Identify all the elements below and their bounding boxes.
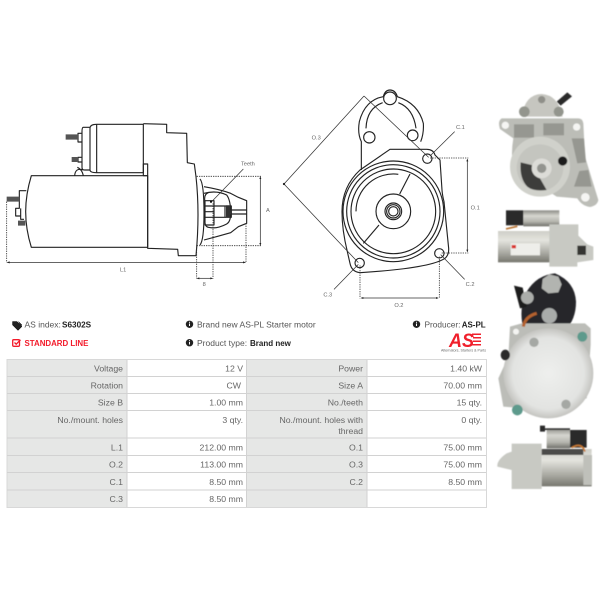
flange plate [498, 323, 591, 408]
row: voltage and power: Voltage [94, 364, 123, 374]
row: O.2 and O.3: O.3 [349, 460, 363, 470]
dimension O.2 [360, 257, 439, 309]
housing [549, 224, 593, 267]
row: C.1 and C.2: C.2 [349, 477, 363, 487]
front view technical drawing [283, 90, 480, 309]
specifications table [7, 360, 486, 508]
info: brand new starter: Brand new AS-PL Starter motor [197, 320, 316, 330]
info: AS index: S6302S [62, 320, 92, 330]
info: product type: Product type: [197, 338, 247, 348]
logo: AS-PL: AS [448, 331, 474, 352]
row: size B and teeth: Size B [98, 398, 123, 408]
bolts [519, 96, 564, 117]
top mounting ear [359, 90, 423, 170]
row: rotation and size A: Size A [338, 380, 363, 390]
copper wire [523, 313, 537, 327]
dimension O.3 [283, 96, 429, 263]
dark plug [558, 156, 567, 166]
row: size B and teeth: No./teeth [328, 398, 363, 408]
pockets [514, 123, 592, 187]
bracket [514, 286, 527, 308]
row: mount holes: No./mount. holes with [279, 415, 363, 425]
callout C.2: C.2 [466, 282, 474, 288]
logo: AS-PL: Alternators, Starters & Parts [441, 348, 486, 352]
solenoid black cap [521, 273, 576, 330]
dimension L1: L1 [120, 267, 126, 273]
round housing [510, 137, 570, 197]
callout C.1 [430, 125, 465, 156]
wire [572, 445, 585, 452]
dimension L1 [7, 202, 246, 273]
info: AS index: AS index: [24, 320, 61, 330]
row: mount holes [57, 415, 482, 436]
row: C.3 [109, 494, 243, 504]
info: AS index [12, 320, 92, 330]
row: O.2 and O.3: 113.00 mm [200, 460, 243, 470]
row: C.3: C.3 [109, 494, 123, 504]
row: voltage and power: 1.40 kW [450, 364, 483, 374]
photo: starter front view [499, 92, 598, 207]
callout C.1: C.1 [456, 125, 465, 131]
row: L.1 and O.1: L.1 [111, 442, 123, 452]
motor cylinder [498, 231, 551, 262]
row: C.1 and C.2 [109, 477, 482, 487]
dimension O.3: O.3 [312, 135, 321, 141]
row: L.1 and O.1: 75.00 mm [443, 442, 482, 452]
icon: info circle [186, 321, 193, 328]
logo: AS-PL [441, 331, 486, 352]
drive housing [143, 124, 198, 256]
wire [506, 226, 517, 229]
photo: starter side view top [498, 210, 593, 267]
row: rotation and size A: Rotation [91, 380, 123, 390]
drive housing [497, 444, 542, 489]
black connector [557, 92, 572, 106]
solenoid [66, 124, 143, 176]
icon: info circle [413, 321, 420, 328]
drive end [577, 246, 586, 255]
end clamp [583, 455, 592, 485]
solenoid can [547, 428, 570, 448]
flange [499, 118, 598, 207]
dimension O.1: O.1 [471, 205, 480, 211]
side view technical drawing [7, 124, 270, 288]
row: size B and teeth [98, 398, 482, 408]
row: O.2 and O.3: O.2 [109, 460, 123, 470]
callout C.3 [323, 264, 358, 298]
label sticker [511, 243, 540, 255]
motor cylinder [542, 449, 592, 486]
flange holes [502, 122, 590, 202]
flange outline [342, 149, 449, 273]
rear cap [503, 328, 593, 418]
row: C.1 and C.2: C.1 [109, 477, 123, 487]
row: voltage and power [94, 364, 483, 374]
pinion nose [200, 179, 247, 245]
row: C.1 and C.2: 8.50 mm [448, 477, 482, 487]
row: C.1 and C.2: 8.50 mm [209, 477, 243, 487]
row: mount holes: thread [338, 426, 363, 436]
solenoid can [523, 210, 559, 226]
info: standard line: STANDARD LINE [24, 339, 88, 348]
row: rotation and size A: 70.00 mm [443, 380, 482, 390]
icon: info circle [186, 339, 193, 346]
dimension B [197, 203, 213, 288]
row: L.1 and O.1 [111, 442, 482, 452]
icon: tags [12, 322, 22, 330]
rear terminals [7, 191, 26, 226]
row: mount holes: 3 qty. [222, 415, 243, 425]
row: rotation and size A [91, 380, 482, 390]
upper lobe [522, 94, 563, 117]
row: rotation and size A: CW [227, 380, 242, 390]
photo: starter rear view [498, 273, 593, 418]
solenoid cap [506, 210, 523, 225]
mounting holes [355, 154, 444, 268]
row: L.1 and O.1: 212.00 mm [200, 442, 243, 452]
dark bracket [542, 449, 583, 455]
row: voltage and power: 12 V [225, 364, 243, 374]
dimension O.1 [430, 158, 480, 253]
row: voltage and power: Power [338, 364, 363, 374]
info: producer [413, 320, 486, 330]
callout C.3: C.3 [323, 292, 332, 298]
motor body [26, 176, 148, 247]
teeth label and leader [210, 162, 255, 203]
callout C.2 [441, 255, 474, 288]
row: mount holes: 0 qty. [461, 415, 482, 425]
photo: starter side view bottom [497, 426, 592, 489]
dimension B: 8 [203, 282, 206, 288]
cap screws [512, 332, 587, 415]
row: O.2 and O.3: 75.00 mm [443, 460, 482, 470]
info: product type [186, 338, 292, 348]
gear window [520, 162, 547, 190]
row: size B and teeth: 1.00 mm [209, 398, 243, 408]
row: L.1 and O.1: O.1 [349, 442, 363, 452]
flange hole [513, 329, 519, 335]
solenoid cap [540, 426, 587, 448]
teeth label and leader: Teeth [241, 162, 255, 168]
row: O.2 and O.3 [109, 460, 482, 470]
info: producer: AS-PL [462, 320, 486, 330]
dimension A: A [266, 208, 270, 214]
info: product type: Brand new [250, 339, 292, 348]
terminal nuts [521, 274, 562, 323]
dimension O.2: O.2 [394, 303, 403, 309]
pinion hub [532, 158, 552, 178]
row: C.3: 8.50 mm [209, 494, 243, 504]
row: mount holes: No./mount. holes [57, 415, 124, 425]
concentric housing [343, 161, 444, 262]
row: size B and teeth: 15 qty. [457, 398, 482, 408]
icon: checked box [13, 340, 20, 346]
table grid [7, 360, 486, 508]
rubber grommet [501, 350, 510, 360]
dimension A [197, 176, 270, 246]
info: producer: Producer: [424, 320, 460, 330]
